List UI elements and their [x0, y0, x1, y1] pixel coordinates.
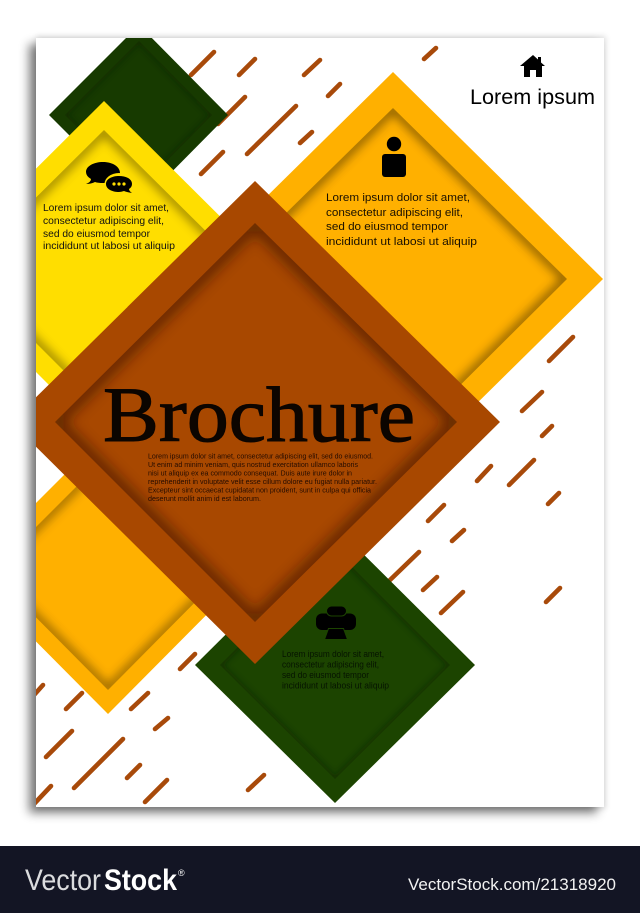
diamond: orange top right: [268, 72, 603, 402]
text block: brown panel: deserunt mollit anim id est laborum.: [148, 494, 261, 503]
page drop shadow: [29, 36, 606, 813]
text block: orange panel: consectetur adipiscing elit,: [326, 207, 463, 219]
diamond: brown centre: [11, 181, 500, 664]
text block: brown panel: nisi ut aliquip ex ea commodo consequat. Duis aute irure dolor in: [148, 468, 352, 478]
brochure page: [36, 38, 604, 807]
icon: printer: [316, 606, 356, 640]
text block: green panel: [282, 649, 389, 690]
text block: brown panel: Excepteur sint occaecat cupidatat non proident, sunt in culpa qui officia: [148, 486, 372, 494]
diamond: dark green bottom: [195, 556, 475, 803]
text block: brown panel: Ut enim ad minim veniam, quis nostrud exercitation ullamco laboris: [148, 460, 358, 469]
footer logo: Vector: [25, 864, 101, 897]
text block: green panel: consectetur adipiscing elit,: [282, 660, 379, 670]
text block: brown panel: Lorem ipsum dolor sit amet, consectetur adipiscing elit, sed do eiusmod.: [148, 452, 373, 460]
diamond: yellow: [36, 101, 220, 385]
text block: brown panel: reprehenderit in voluptate velit esse cillum dolore eu fugiat nulla pariatur.: [148, 477, 377, 486]
footer bar: [0, 846, 640, 913]
diagonal dashes: [34, 48, 573, 804]
text block: green panel: sed do eiusmod tempor: [282, 670, 369, 680]
icon: home: [520, 55, 545, 77]
header label: Lorem ipsum: [470, 86, 595, 109]
text block: green panel: Lorem ipsum dolor sit amet,: [282, 649, 384, 659]
text block: orange panel: sed do eiusmod tempor: [326, 221, 448, 233]
footer logo: Stock: [104, 864, 177, 897]
icon: chat bubbles: [86, 162, 134, 195]
text block: brown panel: [148, 452, 377, 503]
footer image id: VectorStock.com/21318920: [408, 875, 616, 894]
text block: yellow panel: consectetur adipiscing elit,: [43, 216, 164, 227]
text block: orange panel: [326, 192, 477, 248]
text block: green panel: incididunt ut labosi ut aliquip: [282, 680, 389, 690]
text block: yellow panel: [43, 203, 175, 252]
icon: person: [382, 137, 406, 177]
text block: yellow panel: incididunt ut labosi ut aliquip: [43, 241, 175, 252]
text block: yellow panel: sed do eiusmod tempor: [43, 229, 151, 240]
diamond: dark green top: [49, 38, 228, 170]
footer logo: ®: [178, 868, 185, 878]
text block: yellow panel: Lorem ipsum dolor sit amet,: [43, 203, 169, 214]
text block: orange panel: Lorem ipsum dolor sit amet,: [326, 192, 470, 204]
text block: orange panel: incididunt ut labosi ut aliquip: [326, 236, 477, 248]
title: Brochure: [103, 371, 415, 458]
footer logo: [25, 864, 185, 897]
diamond: orange bottom left: [36, 474, 206, 714]
